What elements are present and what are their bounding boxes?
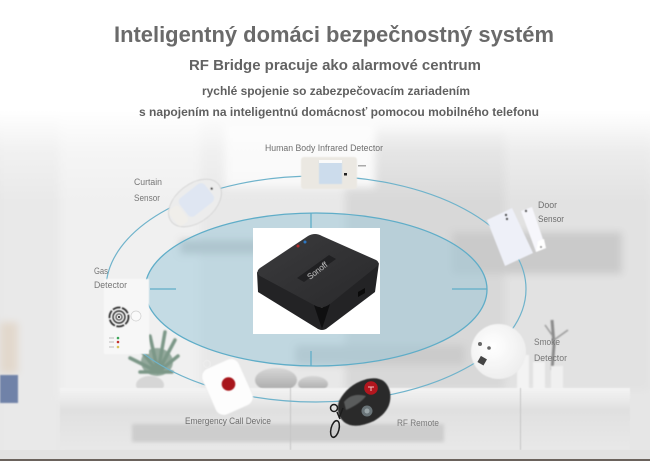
label: gas detector: Detector	[94, 280, 127, 290]
label: door sensor	[538, 200, 564, 224]
title: Inteligentný domáci bezpečnostný systém	[114, 22, 554, 47]
device: curtain sensor	[160, 170, 230, 236]
label: smoke detector: Detector	[534, 353, 567, 363]
label: gas detector: Gas	[94, 266, 108, 276]
label: curtain sensor: Sensor	[134, 193, 160, 203]
label: door sensor: Door	[538, 200, 557, 210]
label: emergency call device: Emergency Call Device	[185, 416, 271, 426]
label: door sensor: Sensor	[538, 214, 564, 224]
subtitle: RF Bridge pracuje ako alarmové centrum	[189, 57, 481, 74]
right decor	[517, 320, 568, 392]
label: smoke detector	[534, 337, 567, 363]
device: RF remote	[329, 378, 390, 438]
cabinet	[60, 388, 630, 450]
device: door sensor	[487, 207, 546, 266]
description line 1: rychlé spojenie so zabezpečovacím zariadením	[202, 84, 470, 98]
vases	[255, 368, 328, 392]
label: RF remote: RF Remote	[397, 418, 439, 428]
label: human body infrared detector: Human Body Infrared Detector	[265, 143, 383, 153]
device: emergency call button	[199, 356, 256, 418]
central RF bridge hub	[253, 228, 380, 334]
outer connection ellipse	[106, 176, 526, 402]
device: gas detector	[104, 279, 149, 354]
label: curtain sensor: Curtain	[134, 177, 162, 187]
plant	[130, 332, 178, 394]
device: human body infrared detector	[301, 157, 366, 189]
inner blue ellipse	[145, 213, 487, 366]
label: curtain sensor	[134, 177, 162, 203]
blue book on left wall	[0, 375, 18, 403]
label: gas detector	[94, 266, 127, 290]
description line 2: s napojením na inteligentnú domácnosť pomocou mobilného telefonu	[139, 105, 539, 119]
label: smoke detector: Smoke	[534, 337, 560, 347]
device: smoke detector	[471, 324, 526, 379]
brand label: Sonoff	[306, 260, 330, 282]
